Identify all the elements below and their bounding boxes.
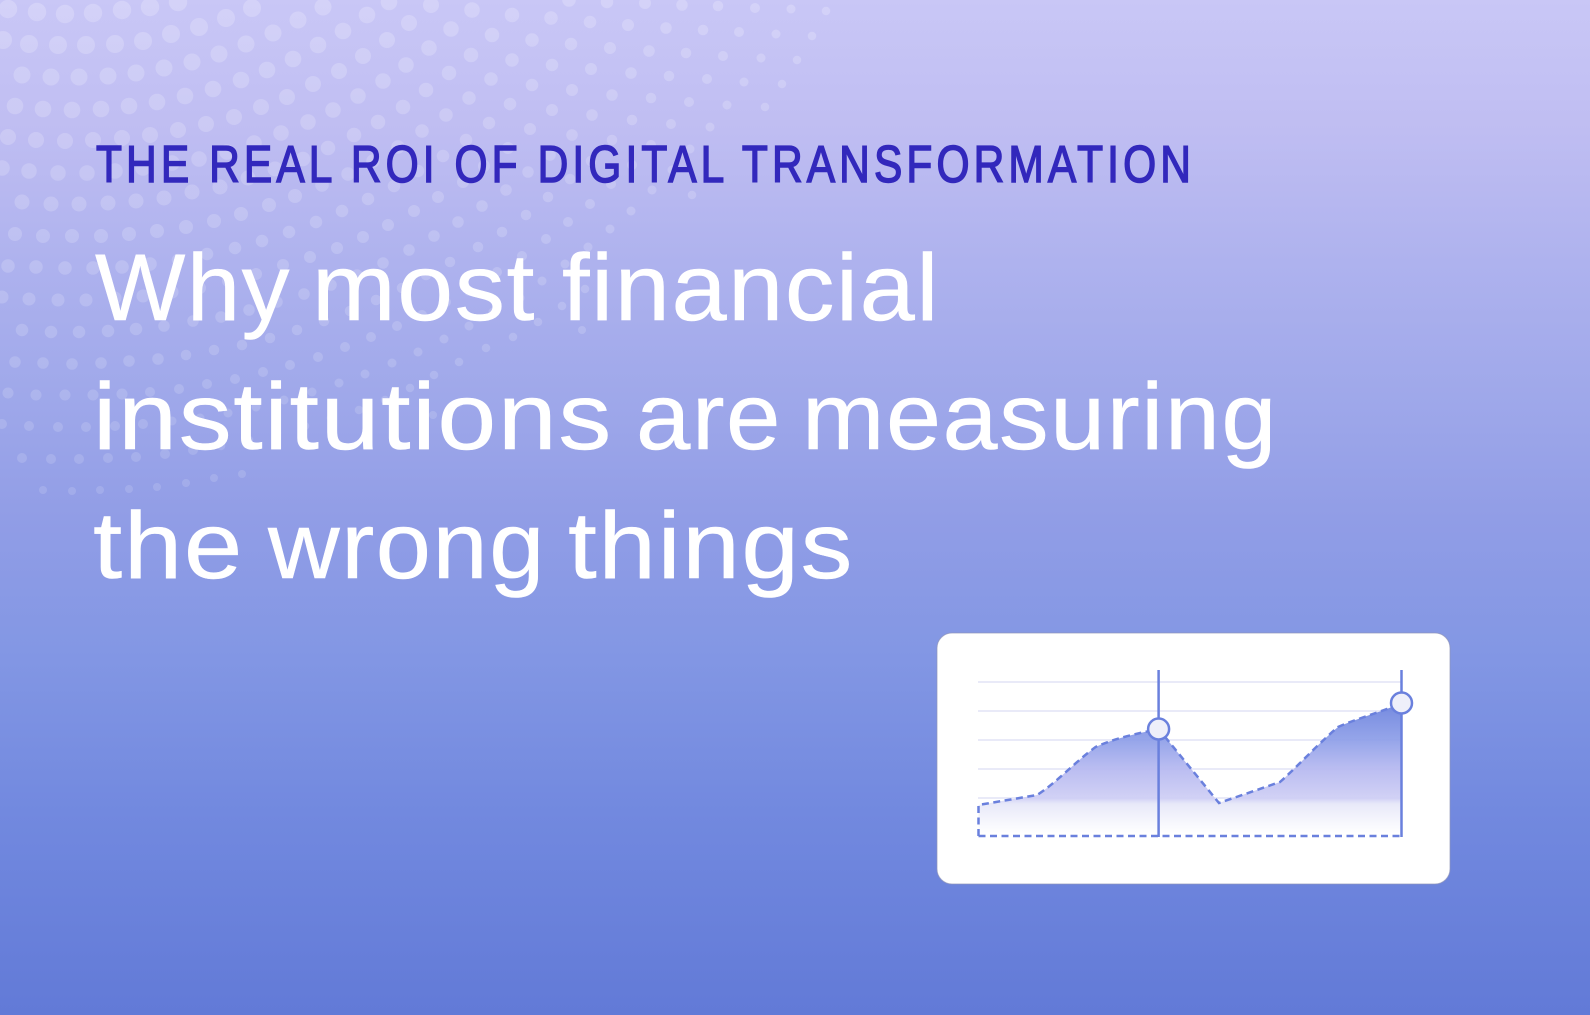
card background	[937, 633, 1450, 884]
main title: are	[636, 364, 782, 470]
main title: institutions	[93, 364, 613, 470]
marker: mid peak	[1148, 718, 1169, 740]
chart card	[937, 633, 1450, 884]
eyebrow heading: THE REAL ROI OF DIGITAL TRANSFORMATION	[96, 136, 1195, 194]
area fill	[978, 703, 1401, 836]
main title: financial	[562, 235, 940, 341]
main title: measuring	[802, 364, 1278, 470]
main title: the	[93, 493, 244, 599]
main title: most	[312, 235, 536, 341]
marker lines	[1159, 670, 1402, 837]
main title: wrong	[267, 493, 546, 599]
dashed baseline	[978, 835, 1401, 837]
main title	[93, 235, 1278, 599]
grid lines	[978, 682, 1401, 798]
main title: things	[568, 493, 854, 599]
dashed curve outline	[978, 703, 1401, 836]
marker: end peak	[1391, 692, 1412, 714]
halftone dot pattern	[2, 0, 826, 491]
main title: Why	[95, 235, 291, 341]
